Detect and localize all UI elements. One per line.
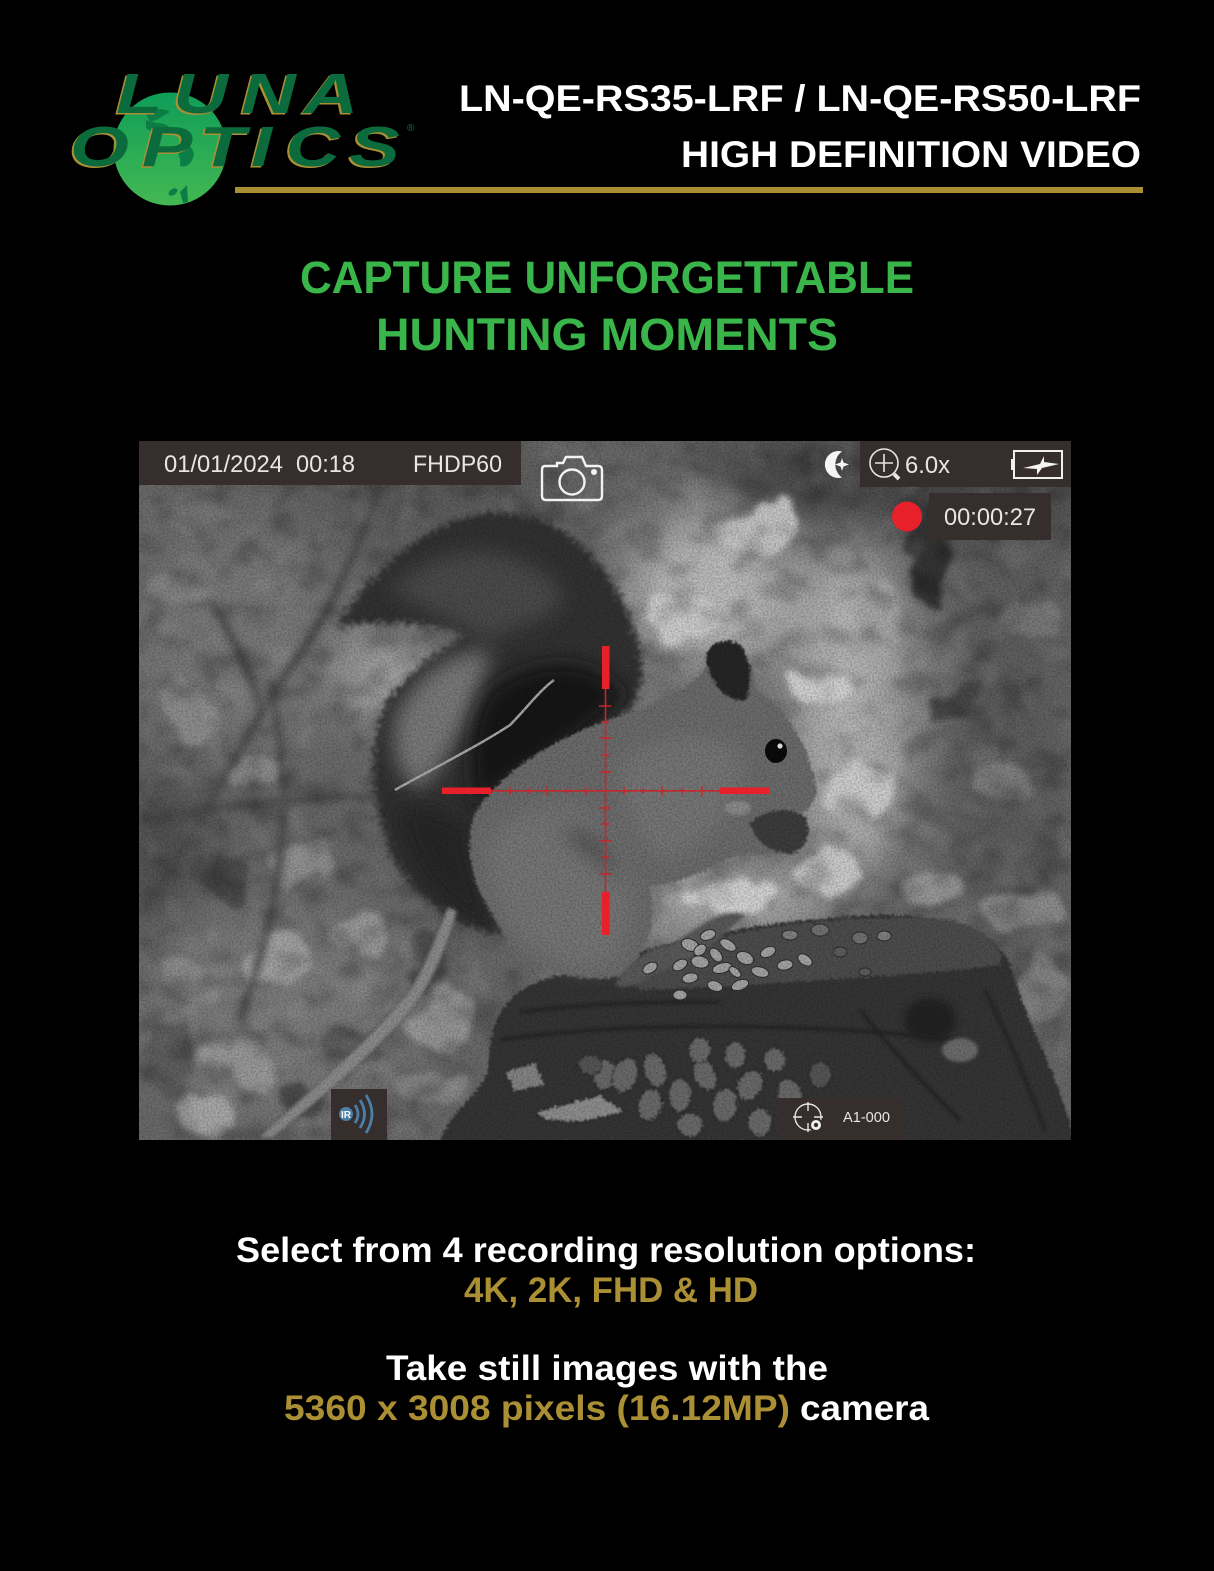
HUD: recording timer xyxy=(929,493,1051,540)
squirrel body xyxy=(470,641,817,987)
squirrel hands xyxy=(750,810,808,854)
leaves and bokeh blotches xyxy=(146,505,1066,1150)
headline xyxy=(300,252,914,360)
icon: globe xyxy=(114,92,226,206)
coarse mottling of leaf litter xyxy=(139,441,1071,1140)
tree stump xyxy=(440,915,1075,1142)
peanut shells on stump xyxy=(641,924,891,1000)
headline: HUNTING MOMENTS xyxy=(376,309,838,360)
text block: still image camera: Take still images with the xyxy=(386,1349,828,1388)
HUD: date, time, resolution bar: 00:18 xyxy=(296,451,355,478)
icon: magnifier xyxy=(870,449,899,479)
header: model names xyxy=(459,78,1141,175)
wordmark: LUNA: LUNA xyxy=(116,62,358,126)
text block: recording resolutions: 4K, 2K, FHD & HD xyxy=(464,1271,758,1310)
icon: crosshair with gear xyxy=(793,1102,823,1132)
photo: night-vision squirrel through scope display xyxy=(130,430,1080,1150)
reticle: ticks xyxy=(510,706,702,874)
HUD: IR indicator: IR xyxy=(341,1110,352,1121)
HUD: recording timer: 00:00:27 xyxy=(944,504,1036,531)
logo: Luna Optics xyxy=(68,62,415,206)
HUD: date, time, resolution bar: 01/01/2024 xyxy=(164,451,283,478)
squirrel eye xyxy=(765,739,787,763)
wordmark: OPTICS: OPTICS xyxy=(70,115,400,179)
wordmark: LUNA: LUNA xyxy=(114,64,356,127)
HUD: IR indicator xyxy=(331,1089,387,1140)
text block: recording resolutions xyxy=(236,1231,976,1310)
header rule xyxy=(235,187,1143,193)
icon: recording dot xyxy=(892,502,922,532)
text block: still image camera xyxy=(284,1349,930,1428)
header: model names: HIGH DEFINITION VIDEO xyxy=(681,134,1141,175)
reticle: thick bars xyxy=(442,646,769,935)
HUD: zero profile: A1-000 xyxy=(843,1109,890,1126)
HUD: zoom and battery bar xyxy=(860,441,1071,487)
light mottling of leaf litter xyxy=(139,441,1071,1140)
forest background tones xyxy=(130,430,1080,1120)
dark branches xyxy=(140,490,380,1020)
wordmark: OPTICS: OPTICS xyxy=(68,117,398,180)
text block: recording resolutions: Select from 4 recording resolution options: xyxy=(236,1231,976,1270)
HUD: zoom and battery bar: 6.0x xyxy=(905,452,950,479)
registered mark: ® xyxy=(407,123,415,134)
reticle: thin cross lines xyxy=(491,689,720,892)
HUD: date, time, resolution bar: FHDP60 xyxy=(413,451,502,478)
squirrel tail xyxy=(335,513,642,935)
headline: CAPTURE UNFORGETTABLE xyxy=(300,252,914,303)
film grain xyxy=(139,441,1071,1140)
reticle xyxy=(442,646,769,935)
text block: still image camera: 5360 x 3008 pixels (16.12MP) xyxy=(284,1389,790,1428)
HUD: zero profile xyxy=(778,1098,903,1140)
light twig across the tail xyxy=(395,680,554,790)
header: model names: LN-QE-RS35-LRF / LN-QE-RS50-LRF xyxy=(459,78,1141,119)
squirrel feet xyxy=(615,913,745,987)
icon: battery charging xyxy=(1011,451,1062,478)
HUD: date, time, resolution bar xyxy=(139,441,521,485)
icon: camera xyxy=(542,457,602,500)
text block: still image camera: camera xyxy=(800,1389,930,1428)
twig in the foreground xyxy=(258,907,457,1138)
peanuts and leaves at the base of the stump xyxy=(505,1037,831,1137)
icon: night mode moon xyxy=(825,451,849,478)
